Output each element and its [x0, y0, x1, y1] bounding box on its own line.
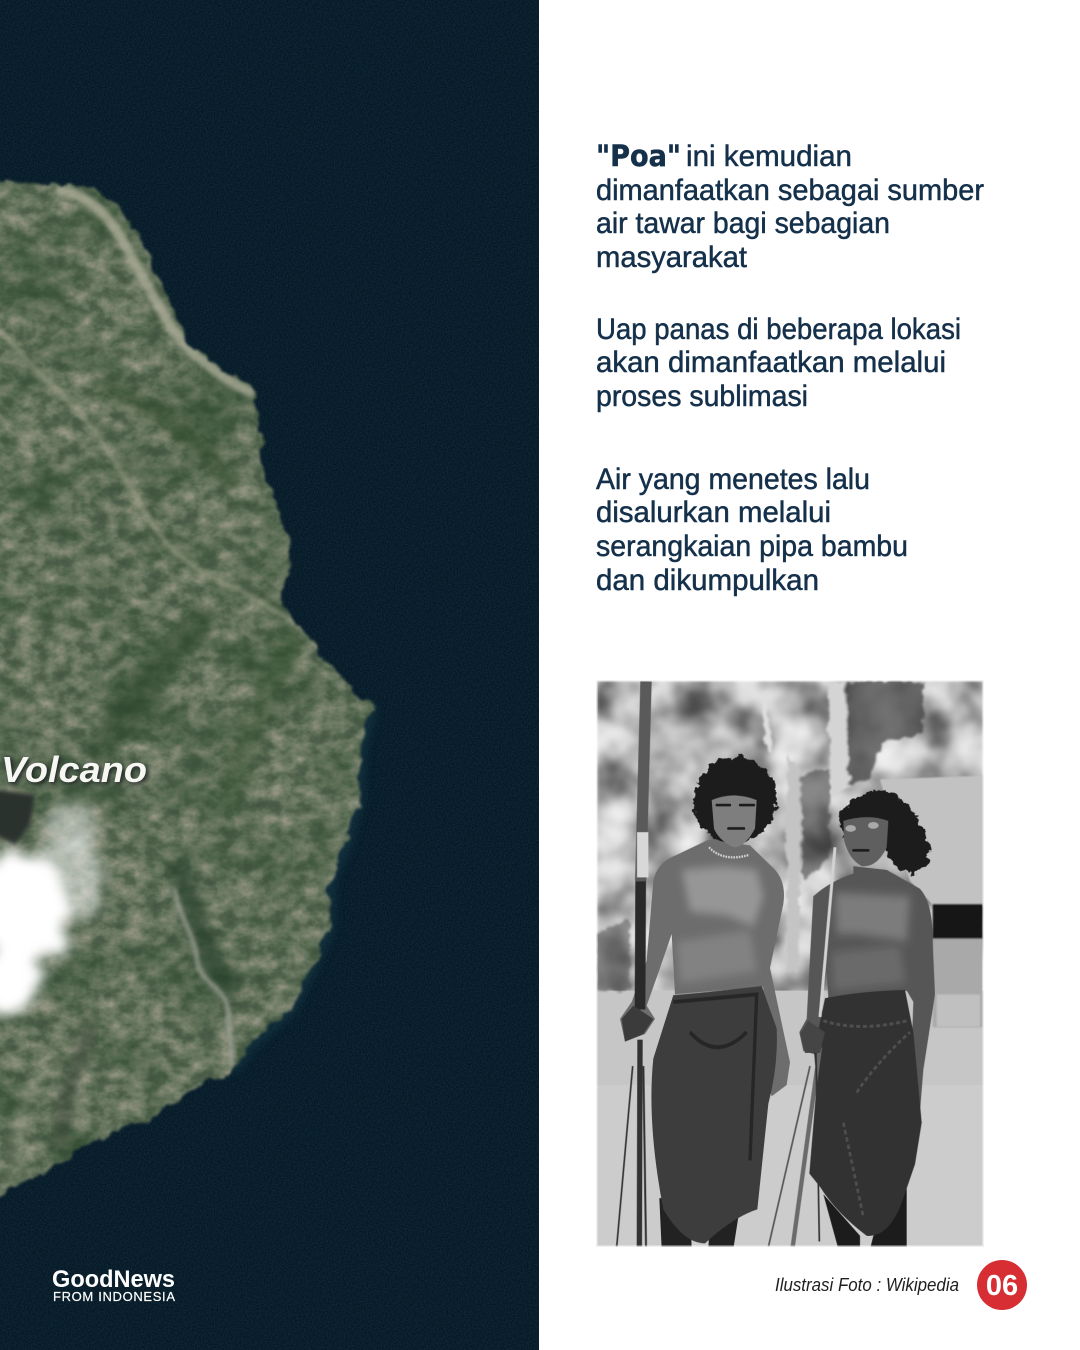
left man	[620, 757, 790, 1249]
text block: uap panas: proses sublimasi	[596, 380, 808, 413]
legs	[659, 1198, 738, 1249]
spears	[617, 681, 835, 1247]
text block: uap panas	[596, 313, 961, 413]
text block: poa: masyarakat	[596, 241, 748, 274]
volcanic cloud	[0, 803, 104, 1014]
text block: uap panas: akan dimanfaatkan melalui	[596, 346, 946, 379]
island land mass	[0, 170, 380, 1210]
logo: GoodNews from Indonesia: FROM INDONESIA	[53, 1289, 175, 1304]
caption: photo credit: Ilustrasi Foto : Wikipedia	[775, 1275, 959, 1295]
text block: poa: dimanfaatkan sebagai sumber	[596, 174, 984, 207]
text block: poa: air tawar bagi sebagian	[596, 207, 890, 240]
text block: air menetes	[596, 463, 908, 597]
logo: GoodNews from Indonesia: GoodNews	[52, 1266, 175, 1293]
skirt	[651, 986, 777, 1243]
hands	[622, 1006, 653, 1042]
ocean	[0, 0, 539, 1350]
text block: air menetes: Air yang menetes lalu	[596, 463, 870, 496]
text block: poa: ini kemudian	[686, 140, 852, 173]
text block: uap panas: Uap panas di beberapa lokasi	[596, 313, 961, 346]
skirt	[809, 990, 922, 1236]
photo soft edge	[596, 680, 984, 1247]
panel: white text background	[539, 0, 1080, 1350]
hut	[880, 776, 985, 1027]
ground	[596, 991, 986, 1255]
coast shallow water	[232, 705, 372, 1070]
torso and arms	[799, 866, 935, 1126]
photo: two men with spears	[596, 680, 986, 1255]
text block: poa: "Poa"	[596, 139, 681, 173]
photo background foliage	[596, 680, 984, 1010]
map label: Volcano: Volcano	[1, 749, 147, 790]
map label: Volcano: Volcano	[3, 751, 149, 792]
text block: poa	[596, 139, 984, 274]
necklace	[709, 847, 749, 857]
page number badge	[977, 1260, 1027, 1310]
text block: air menetes: dan dikumpulkan	[596, 564, 819, 597]
panel: satellite map of island	[0, 0, 539, 1350]
text block: air menetes: serangkaian pipa bambu	[596, 530, 908, 563]
text block: air menetes: disalurkan melalui	[596, 496, 831, 529]
legs	[823, 1187, 907, 1249]
hair	[838, 791, 930, 874]
background tree trunks	[596, 681, 923, 991]
face	[843, 817, 888, 866]
hair	[693, 757, 777, 844]
torso and arms	[620, 840, 790, 1096]
crater dark patch	[0, 790, 35, 845]
right man	[799, 791, 935, 1249]
face	[712, 795, 757, 847]
page number badge: 06	[986, 1270, 1018, 1302]
